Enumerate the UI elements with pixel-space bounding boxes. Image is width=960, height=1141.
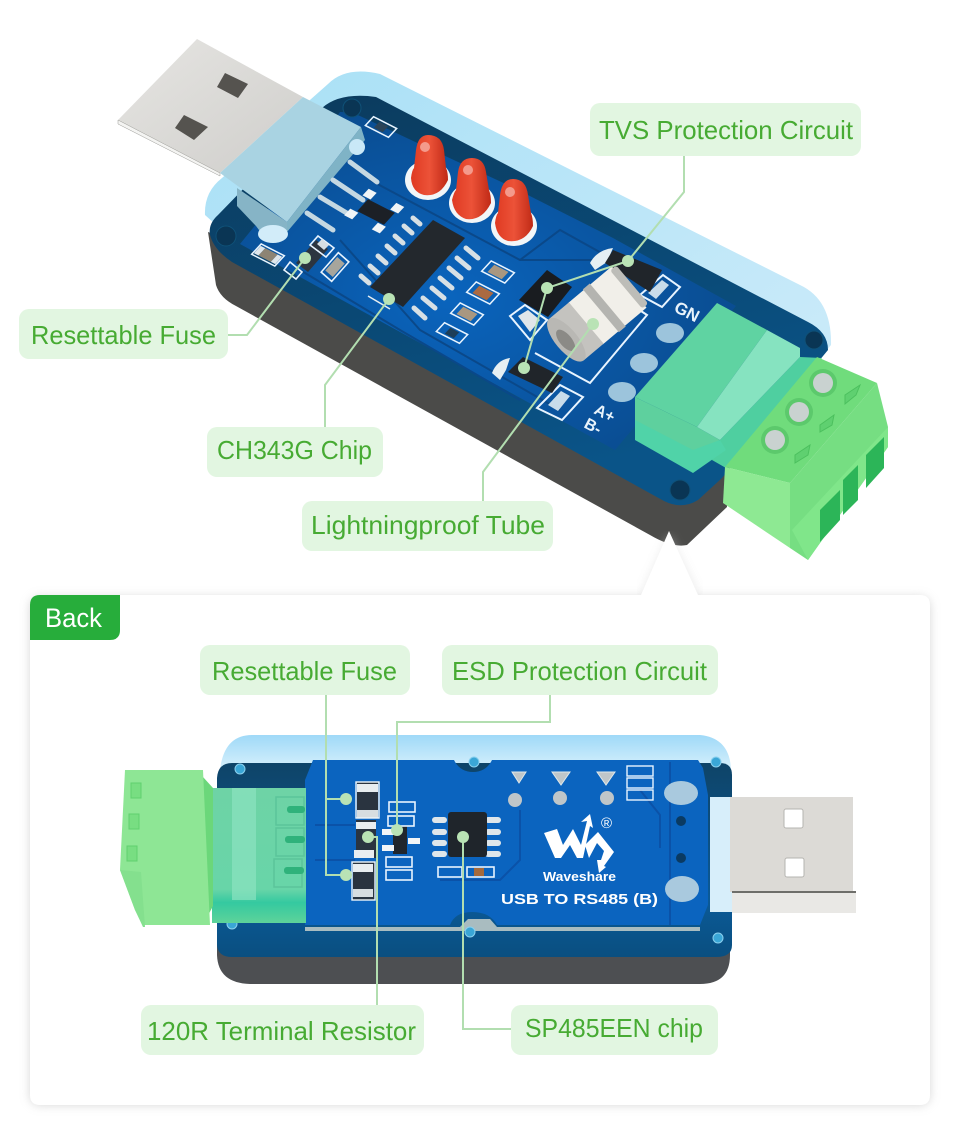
fuse upper bbox=[356, 782, 379, 818]
rear resettable fuse leader bbox=[326, 695, 352, 881]
green terminal block bbox=[723, 357, 888, 560]
CH343G chip bbox=[361, 218, 478, 318]
silk block top right bbox=[627, 766, 653, 800]
case frame bbox=[217, 763, 732, 957]
ESD leader bbox=[391, 695, 550, 836]
GN silkscreen: GN bbox=[671, 298, 703, 326]
shell solder leads bbox=[307, 162, 377, 230]
fuse lower bbox=[352, 862, 375, 900]
terminal small windows bbox=[795, 385, 860, 463]
board edge bbox=[305, 919, 700, 931]
mint terminal block socket under glass bbox=[635, 303, 822, 473]
CH343G leader bbox=[325, 293, 395, 427]
resettable fuse leader bbox=[228, 252, 311, 335]
resettable fuse component bbox=[284, 236, 334, 279]
label: TVS Protection Circuit bbox=[590, 103, 861, 156]
label: Resettable Fuse rear bbox=[200, 645, 410, 695]
solder joints and GN / A+ B- silkscreen bbox=[581, 298, 703, 438]
silver pads row bbox=[508, 772, 615, 807]
lightningproof gas tube bbox=[535, 263, 650, 383]
back tag text: Back bbox=[45, 603, 102, 633]
red LED 1 bbox=[405, 135, 451, 200]
registered mark: ® bbox=[601, 815, 612, 832]
circuit board bbox=[305, 760, 708, 925]
board traces bbox=[315, 762, 670, 925]
back tag bbox=[30, 595, 120, 640]
silver USB plug bbox=[118, 39, 303, 176]
green terminal block bbox=[120, 770, 213, 927]
lightningproof leader bbox=[483, 318, 599, 501]
label: TVS Protection Circuit: TVS Protection Circuit bbox=[599, 115, 854, 145]
label: CH343G Chip: CH343G Chip bbox=[217, 435, 372, 465]
label: CH343G Chip bbox=[207, 427, 383, 477]
TVS callout leader bbox=[518, 155, 684, 374]
B- silkscreen: B- bbox=[581, 416, 604, 438]
SOT transistor bbox=[344, 189, 404, 233]
grey case base bbox=[217, 940, 730, 984]
A+ silkscreen: A+ bbox=[591, 402, 618, 426]
rear view of adapter bbox=[120, 735, 856, 984]
label: 120R Terminal Resistor: 120R Terminal Resistor bbox=[147, 1016, 416, 1046]
terminal screws bbox=[761, 369, 837, 454]
USB plug bbox=[710, 797, 856, 913]
red LED 3 bbox=[491, 179, 537, 246]
rear panel pointer shadow bbox=[640, 534, 700, 596]
mint socket bbox=[212, 788, 306, 923]
TVS diode upper bbox=[590, 248, 680, 307]
label: Resettable Fuse front: Resettable Fuse bbox=[31, 320, 216, 350]
label: SP485EEN chip bbox=[511, 1005, 718, 1055]
label: ESD Protection Circuit: ESD Protection Circuit bbox=[452, 656, 708, 686]
Waveshare wordmark: Waveshare bbox=[543, 869, 616, 884]
rear panel shadow bbox=[30, 597, 930, 1105]
red LED 2 bbox=[449, 158, 495, 223]
label: Lightningproof Tube bbox=[302, 501, 553, 551]
TVS diode lower bbox=[492, 357, 583, 420]
plug window holes bbox=[217, 73, 248, 98]
terminal slot openings bbox=[820, 490, 840, 542]
blue case frame bbox=[210, 96, 828, 505]
ESD protection transistor bbox=[382, 802, 420, 880]
label: Resettable Fuse front bbox=[19, 309, 228, 359]
plug holes bbox=[784, 809, 803, 828]
label: SP485EEN chip: SP485EEN chip bbox=[525, 1013, 703, 1043]
resistors under chip bbox=[438, 867, 462, 877]
mounting hole marks bbox=[216, 99, 823, 500]
USB metal shell under glass bbox=[220, 97, 377, 243]
120R resistor bbox=[354, 820, 376, 858]
120R leader bbox=[362, 831, 377, 1005]
callout lines and dots bbox=[228, 155, 684, 1029]
rear view panel bbox=[30, 531, 930, 1105]
board name: USB TO RS485 (B) bbox=[501, 891, 658, 908]
small SMD parts near fuse bbox=[252, 117, 397, 281]
label: Resettable Fuse rear: Resettable Fuse bbox=[212, 656, 397, 686]
TVS diode middle bbox=[510, 270, 572, 340]
glass case top bbox=[220, 735, 731, 770]
circuit board bbox=[240, 112, 736, 450]
SP485EEN chip bbox=[432, 812, 501, 877]
terminal windows bbox=[127, 783, 141, 861]
USB solder joints bbox=[664, 781, 699, 902]
SP485EEN leader bbox=[457, 831, 511, 1029]
Waveshare logo bbox=[501, 814, 658, 908]
board traces bbox=[300, 180, 650, 410]
SMD resistors right of chip bbox=[436, 261, 514, 343]
label: 120R Terminal Resistor bbox=[141, 1005, 424, 1055]
front view of USB to RS485 adapter bbox=[118, 39, 888, 560]
dark grey case base bbox=[208, 232, 728, 546]
translucent case top glow bbox=[205, 72, 831, 480]
frame screws bbox=[227, 757, 723, 943]
label: ESD Protection Circuit bbox=[442, 645, 718, 695]
label: Lightningproof Tube: Lightningproof Tube bbox=[311, 510, 545, 540]
